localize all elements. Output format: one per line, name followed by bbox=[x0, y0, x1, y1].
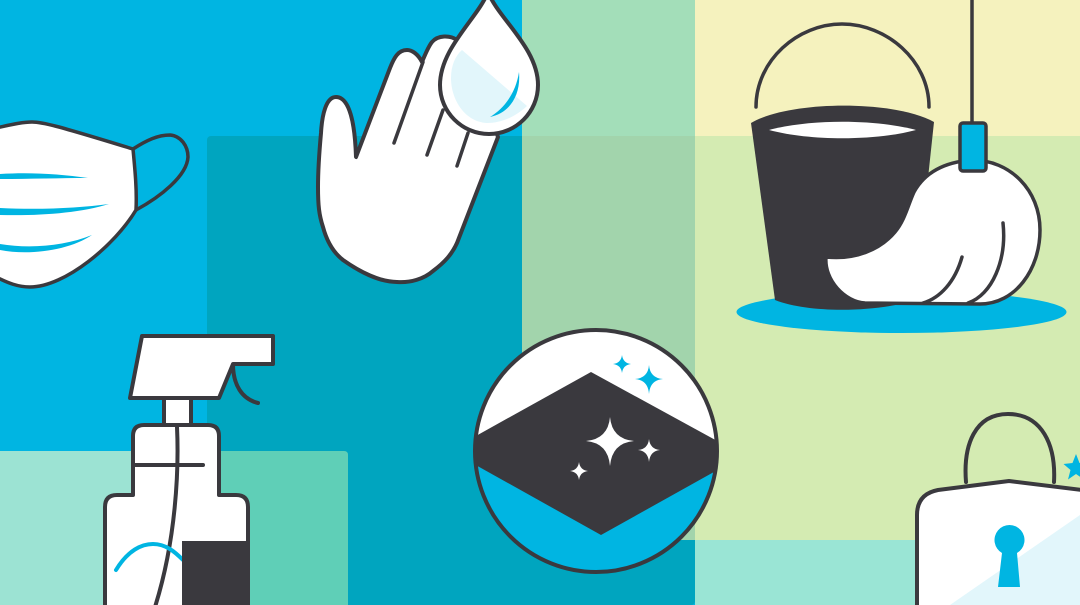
dark label bbox=[182, 541, 250, 605]
star bbox=[1064, 454, 1080, 480]
dip tube bbox=[155, 427, 178, 605]
icon: bucket and mop bbox=[736, 0, 1066, 333]
icon: sparkling surface circle bbox=[465, 330, 730, 580]
bucket bbox=[751, 106, 934, 310]
bucket opening bbox=[769, 122, 916, 138]
drop highlight bbox=[451, 50, 527, 123]
mop strands bbox=[923, 223, 1004, 303]
icon: hand soap bag bbox=[917, 414, 1080, 605]
bottle body bbox=[105, 425, 248, 605]
mop handle bbox=[970, 0, 974, 124]
icon: spray bottle bbox=[105, 336, 273, 605]
liquid wave bbox=[116, 544, 183, 570]
circle fill bbox=[475, 330, 717, 572]
trigger curve bbox=[233, 364, 258, 403]
mask ear loop bbox=[133, 135, 188, 210]
neck bbox=[164, 398, 191, 425]
bag body bbox=[917, 481, 1080, 605]
water drop bbox=[440, 0, 538, 134]
icon: hand with water drop bbox=[318, 0, 538, 282]
label line bbox=[135, 463, 203, 467]
sparkles blue bbox=[613, 355, 663, 394]
bucket handle bbox=[756, 24, 929, 107]
mask body bbox=[0, 122, 136, 287]
sparkles white bbox=[570, 417, 660, 480]
finger lines bbox=[394, 62, 468, 166]
keyhole bbox=[994, 525, 1025, 587]
mop ferrule bbox=[960, 123, 986, 171]
bag handle bbox=[966, 414, 1054, 482]
mop head bbox=[826, 160, 1040, 304]
icon: face mask bbox=[0, 122, 188, 287]
mask pleats bbox=[0, 173, 109, 252]
puddle bbox=[736, 291, 1066, 333]
clipped surface bbox=[477, 372, 715, 570]
drop shine bbox=[490, 72, 519, 117]
hand bbox=[318, 36, 498, 282]
bag highlight bbox=[950, 515, 1080, 605]
spray head bbox=[130, 336, 273, 398]
circle outline bbox=[475, 330, 717, 572]
